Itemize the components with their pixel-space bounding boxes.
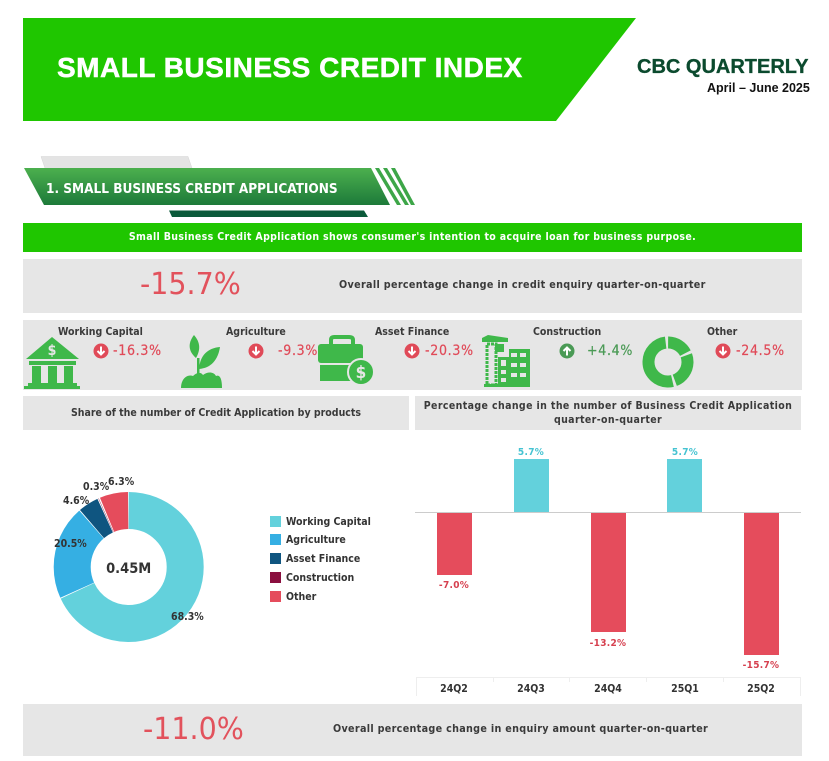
description: Overall percentage change in enquiry amount quarter-on-quarter — [333, 722, 708, 735]
icon: down arrow — [94, 344, 108, 358]
donut chart: 4.6% — [63, 495, 90, 507]
value: +4.4% — [587, 343, 633, 359]
legend: Agriculture — [286, 534, 346, 546]
publication name: CBC QUARTERLY — [637, 56, 808, 78]
section heading ribbon — [24, 156, 415, 217]
donut chart: 6.3% — [108, 476, 135, 488]
legend — [270, 516, 371, 603]
green description bar — [23, 223, 802, 252]
label: asset finance: Asset Finance — [375, 326, 449, 338]
icon: briefcase with dollar — [318, 335, 373, 384]
icon: down arrow — [404, 344, 420, 358]
title: SMALL BUSINESS CREDIT INDEX — [57, 52, 523, 83]
label: construction: Construction — [533, 326, 601, 338]
icon: down arrow — [248, 344, 264, 358]
donut chart: 20.5% — [54, 538, 87, 550]
bar chart: -15.7% — [743, 660, 779, 671]
panel: product changes — [23, 320, 802, 390]
axis labels: 24Q2 — [440, 683, 468, 695]
bar chart: -13.2% — [590, 638, 626, 649]
icon: bank: $ — [48, 343, 56, 359]
value: -24.5% — [736, 343, 785, 359]
bar chart — [415, 447, 801, 696]
donut chart: 0.3% — [83, 481, 110, 493]
value: -20.3% — [425, 343, 474, 359]
icon: plant — [181, 335, 222, 388]
big number: -15.7% — [140, 267, 241, 302]
icon: up arrow — [560, 344, 574, 358]
legend: Other — [286, 591, 317, 603]
bar chart: -7.0% — [439, 580, 469, 591]
label: other: Other — [707, 326, 737, 338]
heading: share of credit applications: Share of the number of Credit Application by products — [71, 407, 361, 419]
center value: 0.45M — [106, 561, 151, 577]
big number: -11.0% — [143, 712, 244, 747]
bar chart: 5.7% — [672, 447, 698, 458]
value: -9.3% — [278, 343, 318, 359]
publication date: April – June 2025 — [707, 81, 810, 95]
green description bar: Small Business Credit Application shows consumer's intention to acquire loan for business purpose. — [129, 231, 696, 243]
axis labels: 25Q2 — [747, 683, 775, 695]
bar chart: 5.7% — [518, 447, 544, 458]
icon: construction — [482, 335, 530, 387]
heading: share of credit applications — [23, 396, 409, 430]
icon: briefcase with dollar: $ — [356, 363, 366, 383]
axis labels — [440, 683, 775, 695]
legend: Working Capital — [286, 516, 371, 528]
heading: percentage change: Percentage change in the number of Business Credit Application quarter-on-quarter — [424, 400, 792, 426]
label: agriculture: Agriculture — [226, 326, 286, 338]
axis labels: 24Q3 — [517, 683, 545, 695]
panel: overall enquiry amount change — [23, 704, 802, 756]
legend: Construction — [286, 572, 354, 584]
label: working capital: Working Capital — [58, 326, 143, 338]
icon: donut — [642, 336, 694, 388]
header banner — [23, 18, 636, 121]
description: Overall percentage change in credit enquiry quarter-on-quarter — [339, 278, 706, 291]
panel: overall credit enquiry change — [23, 259, 802, 313]
icon: bank — [24, 337, 80, 389]
axis labels: 25Q1 — [671, 683, 699, 695]
axis labels: 24Q4 — [594, 683, 622, 695]
donut chart: 68.3% — [171, 611, 204, 623]
icon: down arrow — [716, 344, 730, 358]
value: -16.3% — [113, 343, 162, 359]
section heading text: 1. SMALL BUSINESS CREDIT APPLICATIONS — [46, 181, 338, 197]
legend: Asset Finance — [286, 553, 360, 565]
donut chart — [54, 476, 371, 642]
